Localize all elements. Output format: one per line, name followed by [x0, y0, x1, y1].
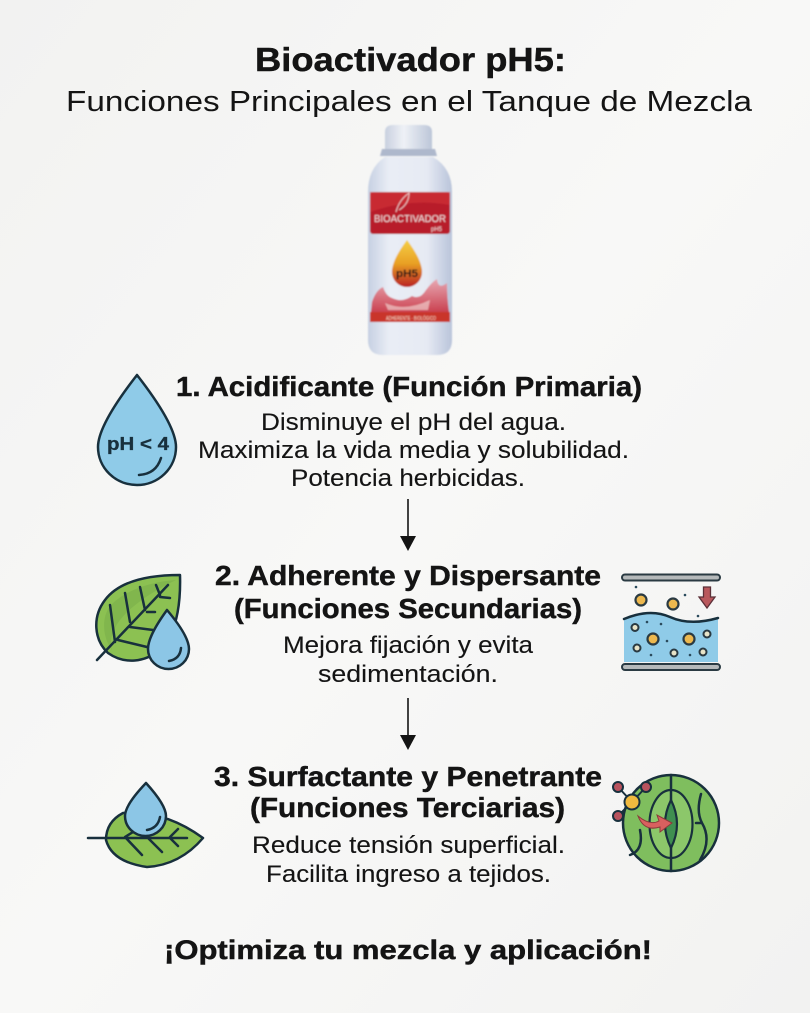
text block 2: sedimentación. [318, 661, 498, 688]
icon: molecule entering leaf tissue [613, 775, 719, 871]
text block 1 [198, 409, 629, 492]
text block 1: Disminuye el pH del agua. [261, 409, 566, 436]
text block 3: Facilita ingreso a tejidos. [266, 861, 551, 888]
product bottle: pH5 [396, 268, 418, 280]
heading 2 [215, 560, 601, 624]
title [66, 41, 753, 118]
heading 3: 3. Surfactante y Penetrante [214, 761, 602, 792]
product bottle: BIOACTIVADOR [374, 213, 446, 225]
section 1 [176, 371, 642, 492]
arrow 1 [400, 499, 416, 551]
arrow 2 [400, 698, 416, 750]
text block 3 [252, 832, 565, 888]
title: Funciones Principales en el Tanque de Mezcla [66, 86, 753, 118]
heading 2: 2. Adherente y Dispersante [215, 560, 601, 591]
text block 3: Reduce tensión superficial. [252, 832, 565, 859]
text block 2 [283, 632, 534, 688]
product bottle: pH5 [431, 227, 443, 233]
icon: leaf with drop on top [88, 783, 203, 867]
icon: tank with particles [622, 574, 720, 670]
icon: water drop pH: pH < 4 [107, 434, 169, 454]
icon: water drop pH [98, 375, 176, 485]
title: Bioactivador pH5: [255, 41, 566, 78]
text block 2: Mejora fijación y evita [283, 632, 534, 659]
section 2 [215, 560, 601, 688]
closing call to action: ¡Optimiza tu mezcla y aplicación! [164, 935, 652, 965]
heading 3: (Funciones Terciarias) [250, 792, 565, 823]
section 3 [214, 761, 602, 888]
icon: leaf with drop [96, 575, 189, 669]
product bottle [368, 125, 452, 355]
text block 1: Potencia herbicidas. [291, 465, 525, 492]
text block 1: Maximiza la vida media y solubilidad. [198, 437, 629, 464]
heading 2: (Funciones Secundarias) [234, 593, 582, 624]
heading 1: 1. Acidificante (Función Primaria) [176, 371, 642, 402]
heading 3 [214, 761, 602, 823]
product bottle: ADHERENTE · BIOLÓGICO [386, 315, 436, 322]
